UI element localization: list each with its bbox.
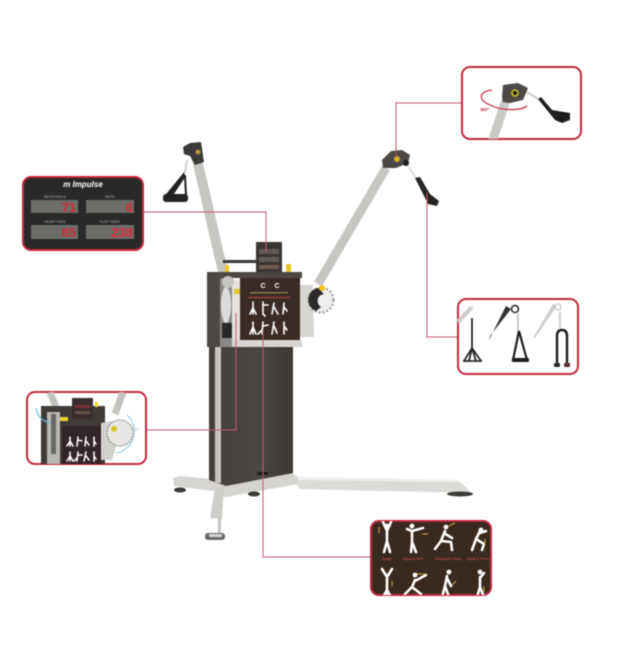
placard figures xyxy=(67,437,96,461)
display: reps: 6 xyxy=(126,200,133,215)
yellow knobs xyxy=(60,402,98,421)
exercise placard: C xyxy=(274,283,280,290)
left arm xyxy=(196,155,226,285)
figures row two xyxy=(382,569,484,597)
display labels: REPS xyxy=(105,195,115,199)
panel: adjustable head close-up xyxy=(27,392,146,466)
left arm head with handle xyxy=(163,142,204,202)
exercise labels xyxy=(382,557,490,561)
angle label: 360° xyxy=(480,107,490,112)
pivot head xyxy=(502,83,528,103)
column xyxy=(209,345,293,486)
display labels: RESISTANCE xyxy=(44,195,67,199)
right rotating plate and disc xyxy=(300,285,334,337)
exercise placard: C xyxy=(260,283,266,290)
callout lines xyxy=(143,103,461,557)
display labels: FLAT TIMER xyxy=(100,220,120,224)
arm xyxy=(492,100,506,142)
feet xyxy=(174,488,473,540)
attachment: straps xyxy=(533,304,570,367)
yellow ring xyxy=(512,90,518,96)
head body xyxy=(41,406,105,466)
panel: 360 degree rotation xyxy=(462,67,581,142)
weight stack head xyxy=(207,272,302,347)
attachment: triangle handle xyxy=(489,306,529,362)
right arm head with handle xyxy=(382,150,439,206)
exercise labels: Woodland Sleep xyxy=(435,557,461,561)
top display unit xyxy=(256,242,282,272)
display: resistance: 71 xyxy=(62,200,76,215)
display: heart rate: 85 xyxy=(62,225,76,240)
panel: console display xyxy=(23,177,143,250)
arms xyxy=(50,392,123,414)
panel: exercise chart xyxy=(371,521,491,597)
handle xyxy=(527,92,570,123)
attachment: rope xyxy=(457,306,482,361)
exercise labels: Squat & Press xyxy=(467,557,490,561)
panel: handle attachments xyxy=(457,299,578,374)
display labels: HEART RATE xyxy=(44,220,67,224)
display labels xyxy=(44,195,120,224)
left blue arrow xyxy=(36,408,50,423)
machine: functional trainer xyxy=(163,142,473,540)
exercise placard xyxy=(240,278,300,340)
figures row one xyxy=(383,522,486,552)
exercise labels: Jumps xyxy=(382,557,392,561)
exercise labels: Squat & Roll xyxy=(403,557,423,561)
right arm xyxy=(318,168,386,284)
rod and yellow knobs xyxy=(223,260,291,272)
brand logo: m Impulse xyxy=(63,180,103,189)
red rotation arrow xyxy=(481,90,527,110)
display: flat timer: 238 xyxy=(111,225,133,240)
base legs xyxy=(173,473,472,534)
side plate and dial: 90° xyxy=(132,427,139,432)
yellow arrows xyxy=(379,523,485,592)
screen xyxy=(72,398,93,419)
